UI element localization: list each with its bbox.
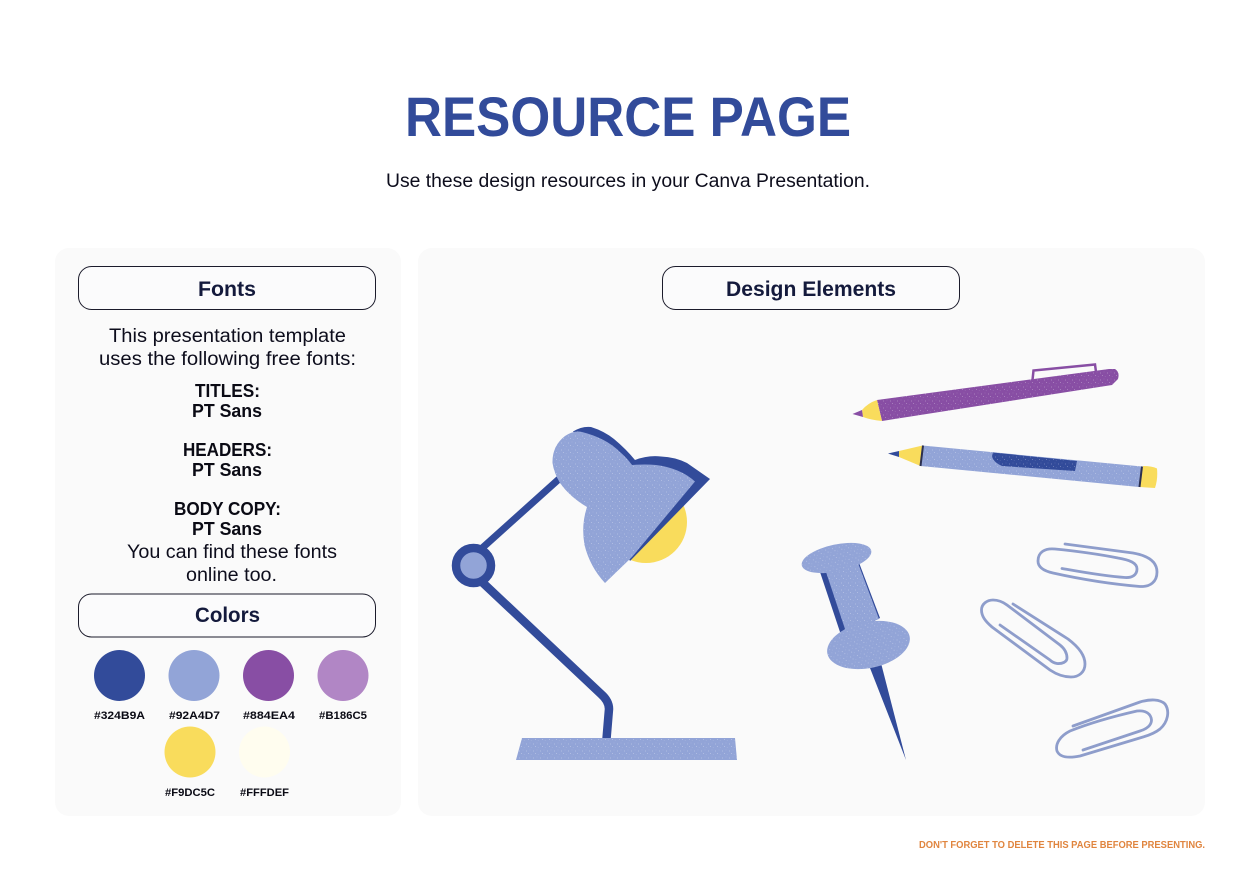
icon: paper clip bottom xyxy=(1057,700,1168,757)
title: RESOURCE PAGE xyxy=(405,85,851,148)
text block: font intro: This presentation template xyxy=(109,326,346,347)
panel: design elements xyxy=(418,248,1205,816)
text block: body copy font xyxy=(174,499,281,539)
swatch: 92A4D7 xyxy=(168,650,220,722)
swatch: 324B9A xyxy=(94,650,145,722)
heading: fonts: Fonts xyxy=(198,278,256,301)
icon: paper clip middle xyxy=(982,600,1085,677)
icon: purple pen xyxy=(852,364,1119,421)
text block: headers font: PT Sans xyxy=(192,460,262,480)
icon: desk lamp xyxy=(456,427,737,760)
text block: body copy font: PT Sans xyxy=(192,519,262,539)
swatch: 884EA4: #884EA4 xyxy=(243,710,296,722)
panel: fonts and colors xyxy=(55,248,401,816)
text block: headers font: HEADERS: xyxy=(183,440,272,460)
text block: titles font xyxy=(192,381,262,421)
text block: font note: online too. xyxy=(186,565,277,586)
text block: headers font xyxy=(183,440,272,480)
heading: fonts xyxy=(78,266,376,310)
swatch: B186C5: #B186C5 xyxy=(319,710,367,722)
heading: design elements xyxy=(662,266,960,310)
swatch: 92A4D7: #92A4D7 xyxy=(169,710,220,722)
swatch: F9DC5C: #F9DC5C xyxy=(165,787,215,799)
swatch: B186C5 xyxy=(318,650,368,722)
text block: body copy font: BODY COPY: xyxy=(174,499,281,519)
text block: font note: You can find these fonts xyxy=(127,542,337,563)
swatch: 324B9A: #324B9A xyxy=(94,710,145,722)
text block: font intro xyxy=(99,326,356,370)
swatch: FFFDEF xyxy=(239,726,290,799)
icon: blue pen xyxy=(888,446,1157,488)
text block: font intro: uses the following free fonts: xyxy=(99,349,356,370)
swatch: 884EA4 xyxy=(243,650,296,722)
icon: paper clip top xyxy=(1038,544,1157,587)
swatch: F9DC5C xyxy=(164,726,216,799)
swatch: FFFDEF: #FFFDEF xyxy=(240,787,289,799)
text block: titles font: TITLES: xyxy=(195,381,260,401)
heading: colors: Colors xyxy=(195,604,260,627)
icon: push pin xyxy=(799,537,914,760)
heading: design elements: Design Elements xyxy=(726,278,896,301)
footer note: DON'T FORGET TO DELETE THIS PAGE BEFORE PRESENTING. xyxy=(919,840,1205,851)
subtitle: Use these design resources in your Canva Presentation. xyxy=(386,171,870,192)
text block: font note xyxy=(127,542,337,586)
heading: colors xyxy=(78,594,376,637)
text block: titles font: PT Sans xyxy=(192,401,262,421)
